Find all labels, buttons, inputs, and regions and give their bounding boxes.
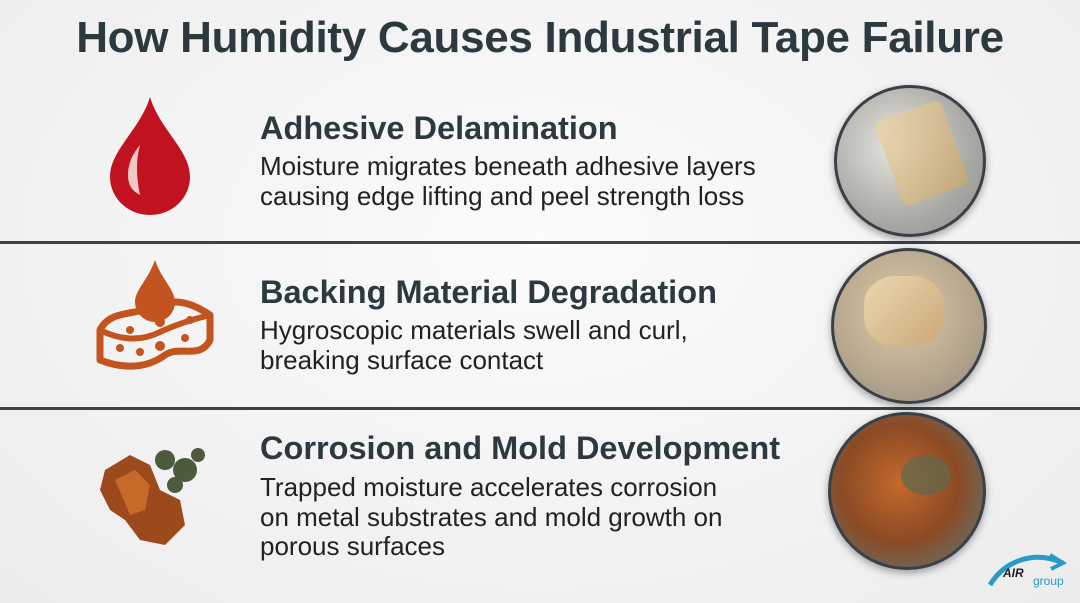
text: Moisture migrates beneath adhesive layers [260,151,756,181]
title: How Humidity Causes Industrial Tape Failure [76,13,1004,62]
text [260,315,688,374]
heading: Corrosion and Mold Development [260,430,780,466]
text: Trapped moisture accelerates corrosion [260,472,717,502]
text [260,472,722,561]
text: on metal substrates and mold growth on [260,502,722,532]
photo: curling tape [831,248,987,404]
icon: rust and mold [100,448,205,545]
text [260,151,756,210]
photo: peeling tape [834,85,986,237]
icon: blood drop [110,97,190,215]
panel: backing material degradation [96,246,992,412]
text: porous surfaces [260,531,445,561]
heading: Backing Material Degradation [260,274,717,310]
logo: AIR [1002,566,1024,580]
logo [988,553,1067,588]
panel: adhesive delamination [110,83,991,245]
text: causing edge lifting and peel strength loss [260,180,744,210]
text: breaking surface contact [260,344,543,374]
text: Hygroscopic materials swell and curl, [260,315,688,345]
photo: rusty pipe [828,412,986,570]
heading: Adhesive Delamination [260,110,618,146]
panel: corrosion and mold [100,410,991,578]
icon: sponge with drop [96,260,214,370]
logo: group [1033,574,1064,588]
